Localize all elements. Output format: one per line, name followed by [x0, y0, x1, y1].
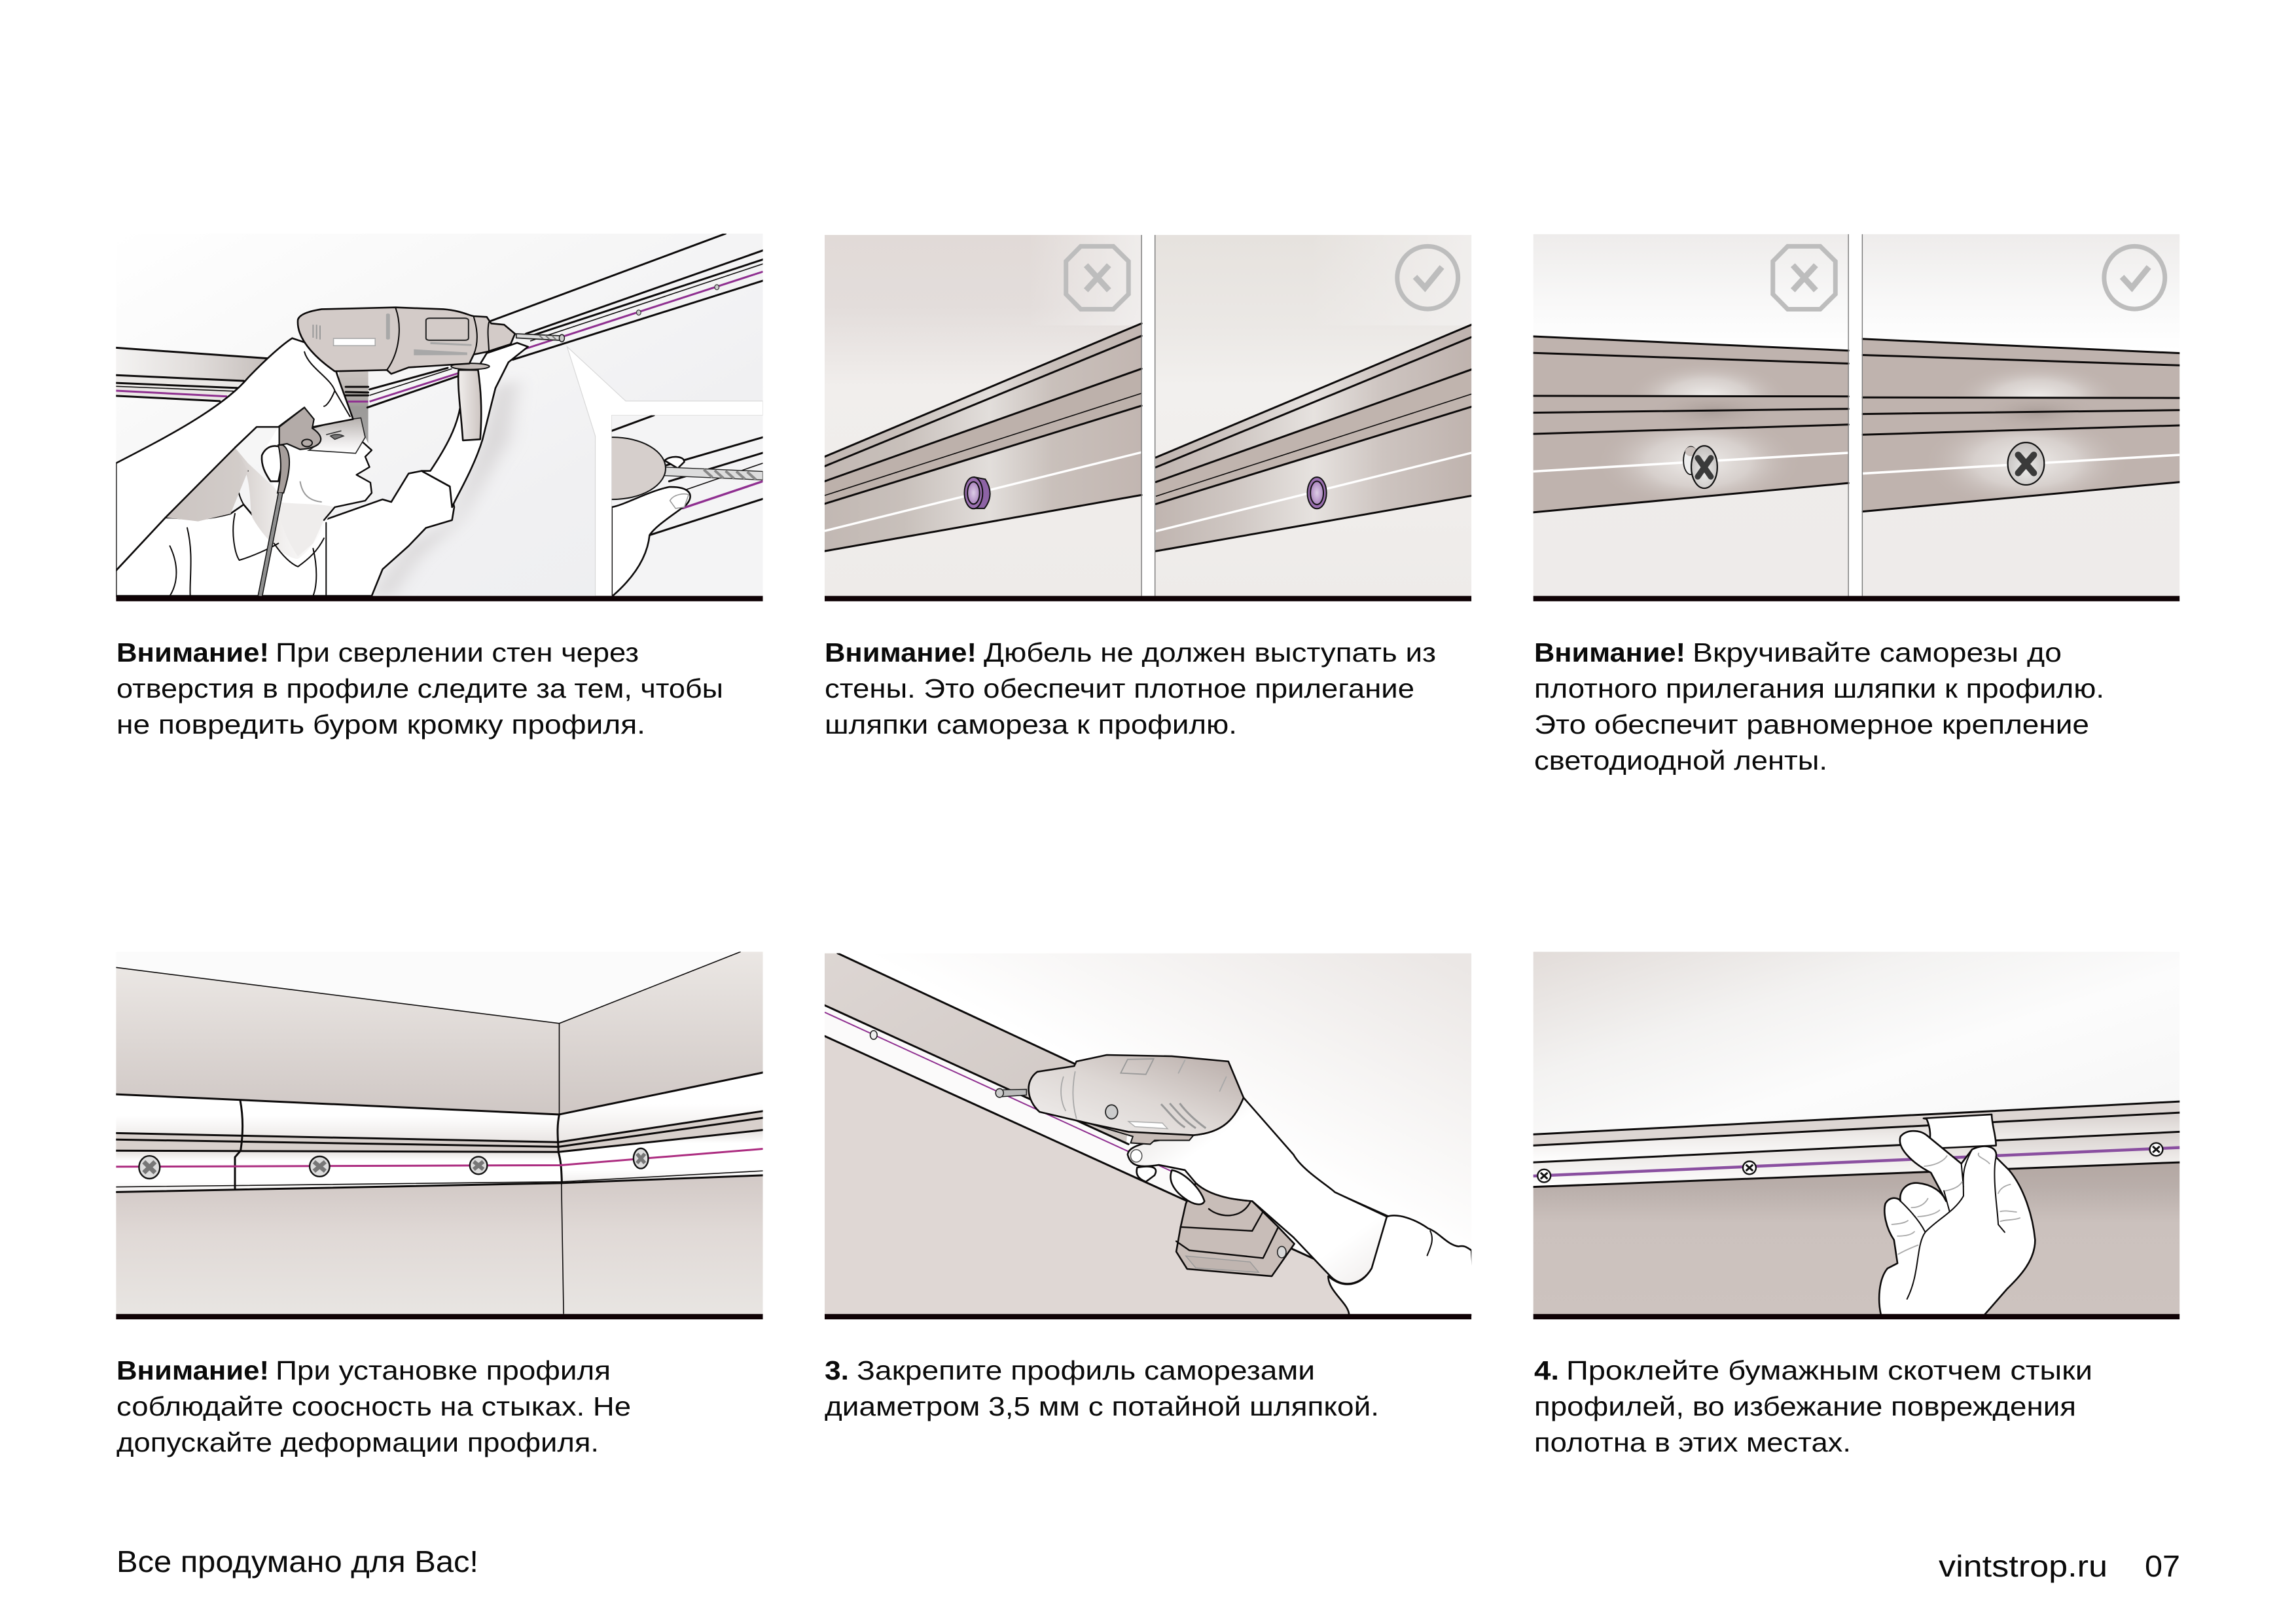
baseline bar	[1534, 1314, 2179, 1319]
panel: fasten profile with screws	[825, 954, 1476, 1319]
correct profile	[1156, 325, 1471, 551]
icon: correct	[2104, 246, 2165, 309]
text block: step 3	[825, 1355, 1379, 1421]
goggles	[309, 418, 365, 454]
text block: dowel warning: стены. Это обеспечит плотное прилегание	[825, 673, 1414, 704]
cord	[278, 445, 289, 493]
correct wall	[1155, 235, 1471, 596]
loose screw	[1683, 446, 1717, 488]
text block: alignment warning: соблюдайте соосность на стыках. Не	[117, 1391, 631, 1421]
correct profile	[1863, 339, 2179, 512]
text block: dowel warning	[825, 637, 1436, 740]
text block: step 4	[1534, 1355, 2092, 1457]
panel: profile alignment at joints	[116, 952, 763, 1319]
wrong profile	[825, 323, 1141, 551]
correct wall light corner	[1311, 235, 1471, 325]
callout inset detail	[560, 416, 763, 596]
text block: step 4: профилей, во избежание повреждения	[1534, 1391, 2076, 1421]
profile lines	[825, 954, 1315, 1259]
ear	[262, 446, 285, 481]
text block: dowel warning: Дюбель не должен выступать из	[984, 637, 1436, 668]
clothing folds	[170, 471, 326, 596]
baseline bar	[116, 596, 763, 601]
page number: 07	[2145, 1549, 2180, 1583]
arm shadow on wall	[372, 378, 517, 596]
hand	[1879, 1131, 2035, 1315]
panel: drilling through profile	[116, 234, 763, 601]
text block: step 4: Проклейте бумажным скотчем стыки	[1566, 1355, 2092, 1385]
divider lines	[1141, 235, 1155, 596]
lower wall	[825, 1036, 1349, 1314]
led profile	[825, 1005, 1315, 1259]
tight screw	[2008, 442, 2044, 485]
head	[261, 404, 372, 556]
battery pack	[1176, 1183, 1295, 1276]
profile lines	[1534, 1101, 2179, 1187]
led strip	[825, 1012, 1172, 1171]
text block: alignment warning: Внимание!	[117, 1355, 269, 1385]
text block: alignment warning	[117, 1355, 631, 1457]
text block: dowel warning: шляпки самореза к профилю.	[825, 709, 1237, 740]
led strip	[116, 1149, 763, 1167]
screwdriver body	[1029, 1055, 1244, 1144]
text block: step 3: диаметром 3,5 мм с потайной шляпкой.	[825, 1391, 1379, 1421]
screws	[139, 1149, 648, 1179]
text block: screw warning: светодиодной ленты.	[1534, 745, 1827, 776]
text block: step 3: Закрепите профиль саморезами	[857, 1355, 1315, 1385]
text block: screw warning	[1534, 637, 2104, 776]
wall continuation behind arm	[1333, 1192, 1387, 1217]
ceiling	[116, 952, 741, 1024]
wrong wall	[1534, 234, 1848, 596]
left profile strip	[116, 348, 268, 401]
joints	[235, 1100, 562, 1188]
profile strips	[1534, 1101, 2179, 1187]
icon: correct	[1397, 246, 1458, 309]
upper wall band	[825, 954, 1131, 1144]
lower wall	[1534, 1162, 2179, 1314]
text block: step 4: полотна в этих местах.	[1534, 1427, 1851, 1457]
text block: drilling warning: Внимание!	[117, 637, 269, 668]
profile lines	[116, 1073, 763, 1192]
led profile right	[558, 1073, 763, 1183]
baseline bar	[825, 1314, 1471, 1319]
text block: drilling warning: отверстия в профиле следите за тем, чтобы	[117, 673, 723, 704]
text block: drilling warning	[117, 637, 723, 740]
drill bit	[996, 1088, 1026, 1097]
wrong wall	[825, 235, 1141, 596]
text block: alignment warning: допускайте деформации профиля.	[117, 1427, 599, 1457]
baseline bar	[825, 596, 1471, 601]
text block: dowel warning: Внимание!	[825, 637, 977, 668]
wall background	[232, 234, 763, 596]
footer website: vintstrop.ru	[1939, 1549, 2108, 1583]
callout wedge	[567, 347, 763, 596]
corner lines	[116, 952, 763, 1314]
lower walls	[116, 1175, 763, 1314]
led profile left	[116, 1094, 562, 1192]
panel: taping the joints	[1534, 952, 2179, 1319]
panel: screw head tight fit	[1534, 234, 2179, 601]
neck shading	[235, 448, 332, 559]
worker body	[116, 471, 454, 596]
screws	[1537, 1143, 2162, 1183]
text block: step 4: 4.	[1534, 1355, 1559, 1385]
divider lines	[1848, 234, 1862, 596]
fingers	[1131, 1150, 1204, 1204]
text block: screw warning: Внимание!	[1534, 637, 1685, 668]
correct wall	[1863, 234, 2179, 596]
text block: drilling warning: не повредить буром кромку профиля.	[117, 709, 645, 740]
side handle	[451, 363, 490, 440]
icon: wrong	[1066, 246, 1128, 309]
footer slogan: Все продумано для Вас!	[117, 1544, 478, 1578]
right arm	[422, 343, 528, 507]
cuff	[1328, 1215, 1476, 1315]
text block: screw warning: плотного прилегания шляпки к профилю.	[1534, 673, 2104, 704]
led strip	[1534, 1148, 2179, 1176]
wrong profile	[1534, 336, 1848, 512]
wrong wall light corner	[1029, 235, 1141, 325]
protruding dowel	[964, 477, 990, 508]
headband	[279, 408, 321, 450]
text block: drilling warning: При сверлении стен через	[276, 637, 639, 668]
text block: alignment warning: При установке профиля	[276, 1355, 611, 1385]
text block: step 3: 3.	[825, 1355, 849, 1385]
paper tape	[1924, 1115, 1996, 1149]
right profile lines	[346, 234, 763, 408]
baseline bar	[1534, 596, 2179, 601]
corner pillar	[339, 371, 368, 444]
raised arm sleeve	[116, 338, 353, 571]
sleeve underside shadow	[166, 427, 257, 522]
icon: wrong	[1773, 246, 1835, 309]
drill body	[298, 308, 564, 374]
ceiling	[1534, 952, 2179, 1159]
panel: dowel must not protrude	[825, 235, 1471, 601]
text block: screw warning: Это обеспечит равномерное крепление	[1534, 709, 2089, 740]
small screw	[870, 1031, 877, 1039]
baseline bar	[116, 1314, 763, 1319]
upper walls	[116, 952, 763, 1115]
forearm and hand	[1128, 1097, 1388, 1284]
background	[825, 954, 1471, 1314]
text block: screw warning: Вкручивайте саморезы до	[1693, 637, 2062, 668]
flush dowel	[1307, 477, 1327, 508]
